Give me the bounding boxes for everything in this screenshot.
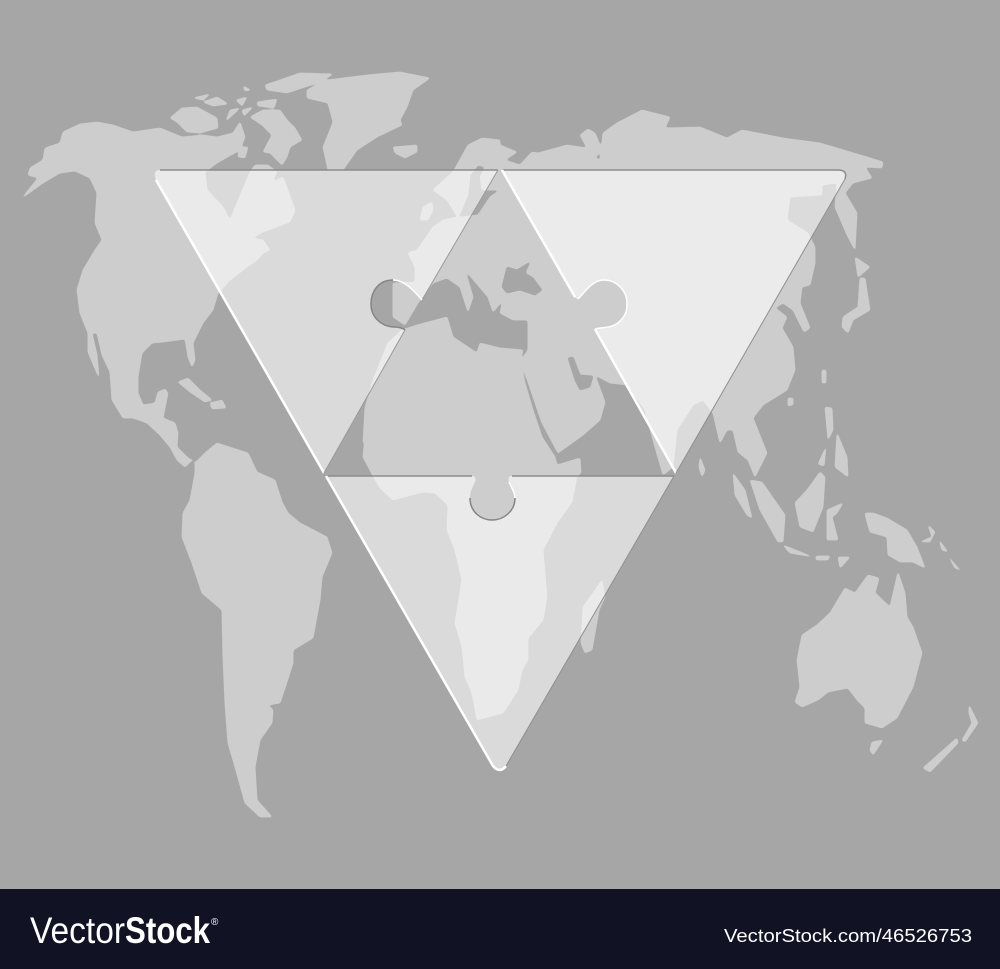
map: New Zealand	[923, 705, 978, 772]
map: Iceland	[393, 145, 417, 158]
map: Asian islands	[699, 257, 962, 571]
map: Ireland and Britain	[420, 202, 433, 220]
glass fill: upper left	[155, 170, 498, 473]
footer image id: VectorStock.com/46526753	[724, 926, 972, 946]
map: South America	[182, 443, 332, 817]
map: Eurasia	[393, 110, 883, 477]
map: Madagascar	[581, 580, 605, 653]
map: Australia	[795, 572, 922, 728]
glass fill: upper right	[502, 170, 846, 473]
map: Africa	[363, 317, 581, 720]
map: Greenland	[307, 72, 430, 170]
glass fill: bottom	[326, 476, 674, 770]
puzzle piece: upper right	[502, 170, 846, 473]
map: Arctic islands	[170, 73, 333, 165]
map: Cuba and Hispaniola	[178, 378, 226, 409]
world map	[22, 72, 978, 817]
footer bar	[0, 889, 1000, 969]
map: Black Sea	[502, 262, 542, 295]
footer bar: ®	[211, 917, 219, 928]
footer logo: Vector	[30, 910, 125, 951]
map: Tasmania	[870, 740, 883, 755]
land masses	[22, 72, 978, 817]
puzzle piece: upper left	[155, 170, 498, 473]
inland seas	[502, 262, 593, 390]
map: Persian Gulf	[568, 357, 593, 390]
footer bar: Stock	[125, 910, 210, 951]
puzzle piece: bottom	[326, 476, 674, 770]
map: North America	[22, 122, 295, 467]
